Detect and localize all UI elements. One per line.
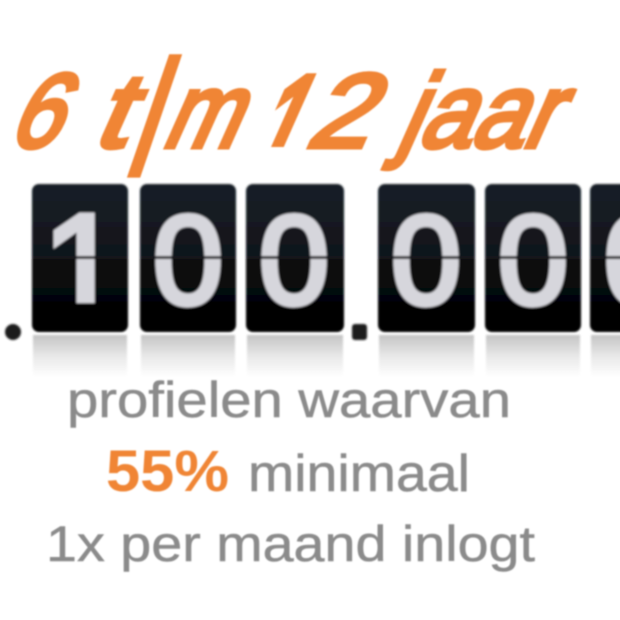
digit card: 0: 0 [498, 190, 568, 331]
caption line 1: profielen waarvan [67, 372, 511, 428]
title: 6 t/m 12 jaar: t [81, 53, 165, 170]
caption highlight: 55%: 55% [106, 439, 229, 504]
digit card: 0 [485, 184, 581, 377]
digit card: 0: 0 [153, 190, 223, 331]
title: 6 t/m 12 jaar: jaar [382, 53, 593, 170]
digit card: 0 [378, 184, 475, 377]
title: 6 t/m 12 jaar: / [124, 24, 185, 212]
digit card: 1: 1 [42, 184, 124, 349]
dot separator left [5, 324, 21, 340]
digit card: 0 [246, 184, 344, 377]
digit card: 0: 0 [259, 190, 329, 331]
flip counter: 1.100.000 [5, 184, 620, 377]
dot separator middle [352, 324, 367, 340]
caption line 2: minimaal [248, 445, 470, 503]
title: 6 t/m 12 jaar: m [150, 53, 276, 170]
title: 6 t/m 12 jaar: 1 [235, 50, 341, 190]
caption line 3: 1x per maand inlogt [46, 516, 535, 572]
caption text [46, 372, 535, 572]
title: 6 t/m 12 jaar: 2 [294, 53, 408, 170]
digit card: 0: 0 [391, 190, 461, 331]
title: 6 t/m 12 jaar [16, 53, 578, 179]
digit card: 0 (cropped) [590, 184, 620, 377]
digit card: 0 [140, 184, 236, 377]
